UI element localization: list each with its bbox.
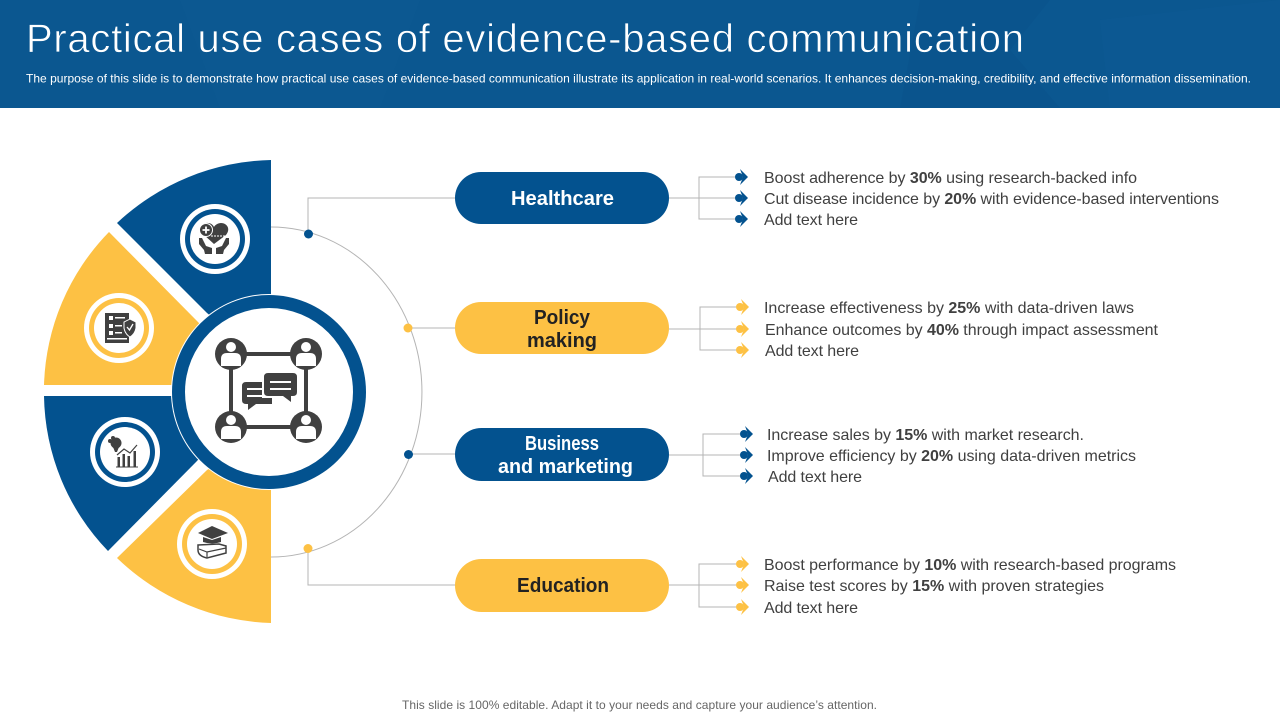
text: business and marketing points: Add text here (768, 469, 862, 486)
badge: business growth icon (90, 417, 160, 487)
text: healthcare points: Boost adherence by 30% using research-backed info (764, 170, 1137, 187)
pill: healthcare: Healthcare (511, 188, 614, 210)
subtitle: The purpose of this slide is to demonstrate how practical use cases of evidence-based communication illustrate its application in real-world scenarios. It enhances decision-making, credibility, and effective information dissemination. (26, 72, 1251, 86)
pill: policy making: Policy (534, 307, 591, 329)
bracket: healthcare (669, 169, 748, 227)
header banner (0, 0, 1280, 108)
bracket: education (669, 556, 749, 615)
pill: education: Education (517, 575, 609, 597)
semicircle segment: education (117, 450, 271, 623)
pill: business and marketing: and marketing (498, 456, 633, 478)
text: business and marketing points: Improve efficiency by 20% using data-driven metrics (767, 448, 1136, 465)
central hub circle (171, 294, 367, 490)
pill: healthcare (455, 172, 669, 224)
text: policy making points (764, 300, 1159, 360)
text: healthcare points: Add text here (764, 212, 858, 229)
pill: business and marketing: Business (525, 433, 599, 455)
badge: policy checklist icon (84, 293, 154, 363)
badge: healthcare icon (180, 204, 250, 274)
text: healthcare points (764, 170, 1219, 229)
badge: education icon (177, 509, 247, 579)
bracket: business and marketing (669, 426, 753, 484)
text: education points: Boost performance by 10% with research-based programs (764, 557, 1176, 574)
text: education points (764, 557, 1176, 617)
semicircle segment: healthcare (117, 160, 271, 340)
text: education points: Add text here (764, 600, 858, 617)
text: education points: Raise test scores by 15% with proven strategies (764, 578, 1104, 595)
pill: policy making (455, 302, 669, 354)
pill: education (455, 559, 669, 612)
icon: networked people with chat bubbles (215, 338, 322, 443)
footer note: This slide is 100% editable. Adapt it to your needs and capture your audience’s attention. (402, 698, 877, 712)
connectors from arc to pills (304, 198, 455, 585)
text: business and marketing points (767, 427, 1136, 486)
text: policy making points: Increase effectiveness by 25% with data-driven laws (764, 300, 1134, 317)
semicircle segment: business and marketing (44, 396, 215, 551)
text: policy making points: Enhance outcomes by 40% through impact assessment (765, 322, 1159, 339)
curved connector arc (271, 227, 422, 557)
pill: policy making: making (527, 330, 597, 352)
semicircle segment: policy making (44, 232, 215, 385)
text: healthcare points: Cut disease incidence by 20% with evidence-based interventions (764, 191, 1219, 208)
title: Practical use cases of evidence-based communication (26, 17, 1024, 61)
bracket: policy making (669, 299, 749, 358)
pill: business and marketing (455, 428, 669, 481)
text: policy making points: Add text here (765, 343, 859, 360)
text: business and marketing points: Increase sales by 15% with market research. (767, 427, 1084, 444)
